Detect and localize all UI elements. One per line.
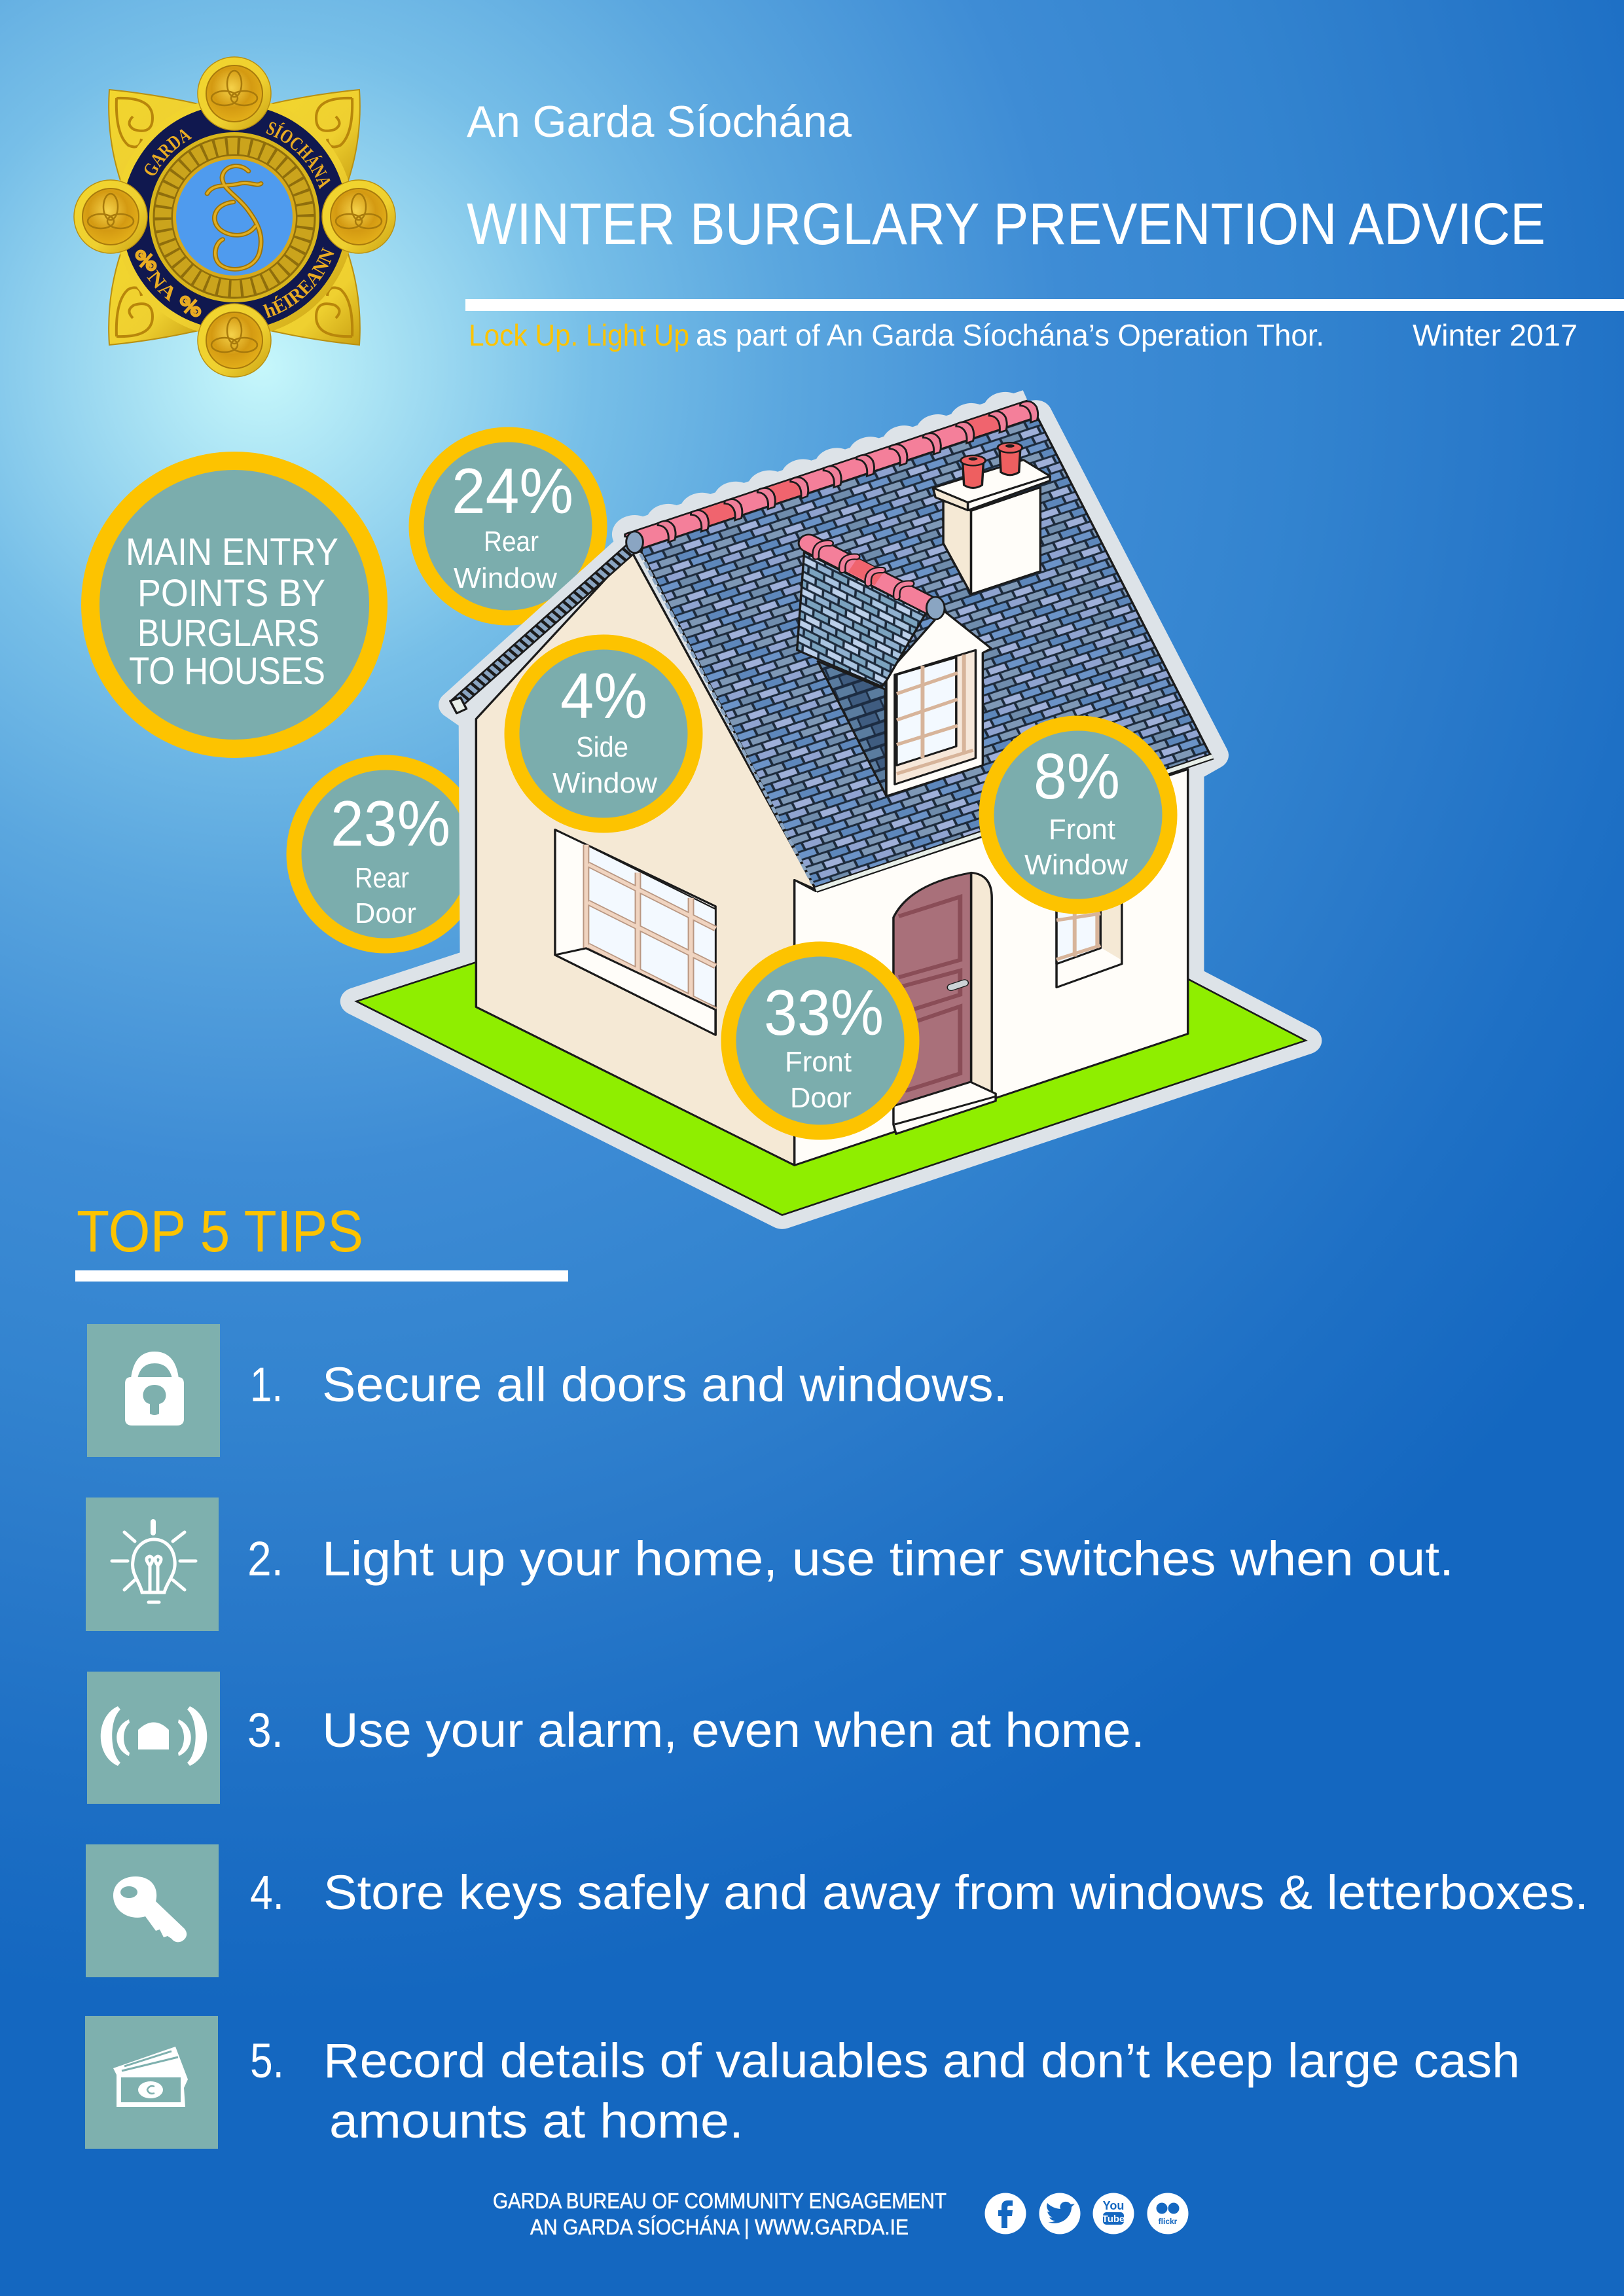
date: Winter 2017 xyxy=(1413,318,1578,352)
icon: youtube: Tube xyxy=(1102,2214,1125,2225)
badge lettering: hÉIREANN xyxy=(262,247,334,318)
icon: padlock xyxy=(87,1324,220,1457)
ridge tiles xyxy=(625,401,1038,553)
house halo xyxy=(356,403,1306,1215)
footer text: AN GARDA SÍOCHÁNA | WWW.GARDA.IE xyxy=(530,2215,909,2239)
heading: top 5 tips: TOP 5 TIPS xyxy=(77,1199,363,1265)
icon: key xyxy=(86,1844,219,1977)
lawn xyxy=(356,962,1306,1215)
tip 5 xyxy=(85,2016,1520,2149)
tip 3: Use your alarm, even when at home. xyxy=(322,1703,1145,1757)
stat: 8% front window: Window xyxy=(1024,849,1128,881)
social icons xyxy=(984,2193,1189,2234)
heading rule xyxy=(75,1270,568,1282)
dormer xyxy=(797,543,991,796)
tip 1: 1. xyxy=(250,1357,283,1412)
stat: 33% front door xyxy=(729,949,912,1132)
front wall xyxy=(795,769,1188,1165)
header rule xyxy=(465,299,1624,311)
icon: light bulb xyxy=(86,1498,219,1631)
stat: 8% front window xyxy=(986,723,1170,906)
stat: 23% rear door: 23% xyxy=(331,787,450,859)
front small window xyxy=(1056,898,1122,988)
tip 5: amounts at home. xyxy=(329,2094,744,2148)
callout: main entry points: BURGLARS xyxy=(137,612,319,655)
tip 3: 3. xyxy=(247,1703,283,1757)
icon: banknotes xyxy=(85,2016,218,2149)
tip 2: 2. xyxy=(247,1532,283,1586)
icon: facebook xyxy=(984,2193,1026,2234)
tip 3 xyxy=(87,1672,1145,1804)
tip 1: Secure all doors and windows. xyxy=(322,1357,1007,1412)
tip 4: Store keys safely and away from windows & letterboxes. xyxy=(323,1865,1589,1920)
icon: flickr: flickr xyxy=(1159,2217,1178,2226)
badge lettering: GARDA xyxy=(145,130,192,175)
callout: main entry points: POINTS BY xyxy=(137,572,325,615)
tip 2 xyxy=(86,1498,1454,1631)
icon: youtube xyxy=(1093,2193,1134,2234)
stat: 8% front window: 8% xyxy=(1034,740,1120,812)
tip 4 xyxy=(86,1844,1589,1977)
icon: twitter xyxy=(1039,2193,1080,2234)
stat: 24% rear window: 24% xyxy=(452,455,573,527)
header: organisation name: An Garda Síochána xyxy=(467,97,852,147)
front door xyxy=(893,872,996,1134)
stat: 4% side window xyxy=(512,642,695,825)
stat: 33% front door: Door xyxy=(790,1082,852,1114)
tip 5: Record details of valuables and don’t keep large cash xyxy=(323,2034,1520,2088)
side window xyxy=(555,830,715,1035)
house illustration xyxy=(356,401,1306,1215)
stat: 8% front window: Front xyxy=(1049,814,1115,846)
badge lettering xyxy=(145,122,334,318)
icon: youtube: You xyxy=(1103,2199,1124,2212)
stat: 33% front door: Front xyxy=(785,1046,852,1078)
badge knots xyxy=(137,251,200,315)
tip 1 xyxy=(87,1324,1007,1457)
badge lettering: SÍOCHÁNA xyxy=(266,122,330,189)
tip 5: 5. xyxy=(250,2034,284,2088)
stat: 4% side window: Side xyxy=(576,731,628,763)
badge lettering: NA xyxy=(147,270,173,302)
stat: 4% side window: Window xyxy=(552,767,657,799)
stat: 4% side window: 4% xyxy=(560,660,647,732)
roof xyxy=(638,414,1210,889)
tip 4: 4. xyxy=(250,1865,284,1920)
stat: 23% rear door: Rear xyxy=(355,862,409,894)
icon: Garda Siochana badge xyxy=(73,56,396,378)
side wall xyxy=(476,551,816,1165)
badge medallions xyxy=(74,57,395,377)
stat: 24% rear window: Rear xyxy=(484,526,539,558)
icon: alarm xyxy=(87,1672,220,1804)
subtitle: as part of An Garda Síochána’s Operation Thor. xyxy=(696,318,1324,352)
stat: 33% front door: 33% xyxy=(764,977,884,1049)
gable edge xyxy=(450,548,632,713)
footer text xyxy=(493,2189,947,2239)
roof verge xyxy=(640,554,812,884)
badge monogram xyxy=(207,166,261,269)
callout: main entry points xyxy=(90,461,378,749)
footer text: GARDA BUREAU OF COMMUNITY ENGAGEMENT xyxy=(493,2189,947,2213)
callout: main entry points: TO HOUSES xyxy=(129,650,325,692)
callout: main entry points: MAIN ENTRY xyxy=(126,531,338,573)
stat: 23% rear door: Door xyxy=(355,897,416,929)
chimney xyxy=(933,442,1050,594)
eaves xyxy=(816,757,1212,889)
icon: flickr xyxy=(1147,2193,1189,2234)
stat: 24% rear window: Window xyxy=(454,562,557,594)
tip 2: Light up your home, use timer switches when out. xyxy=(322,1532,1454,1586)
stat: 24% rear window xyxy=(416,435,600,618)
subtitle: Lock Up. Light Up xyxy=(469,318,689,352)
stat: 23% rear door xyxy=(294,762,477,946)
